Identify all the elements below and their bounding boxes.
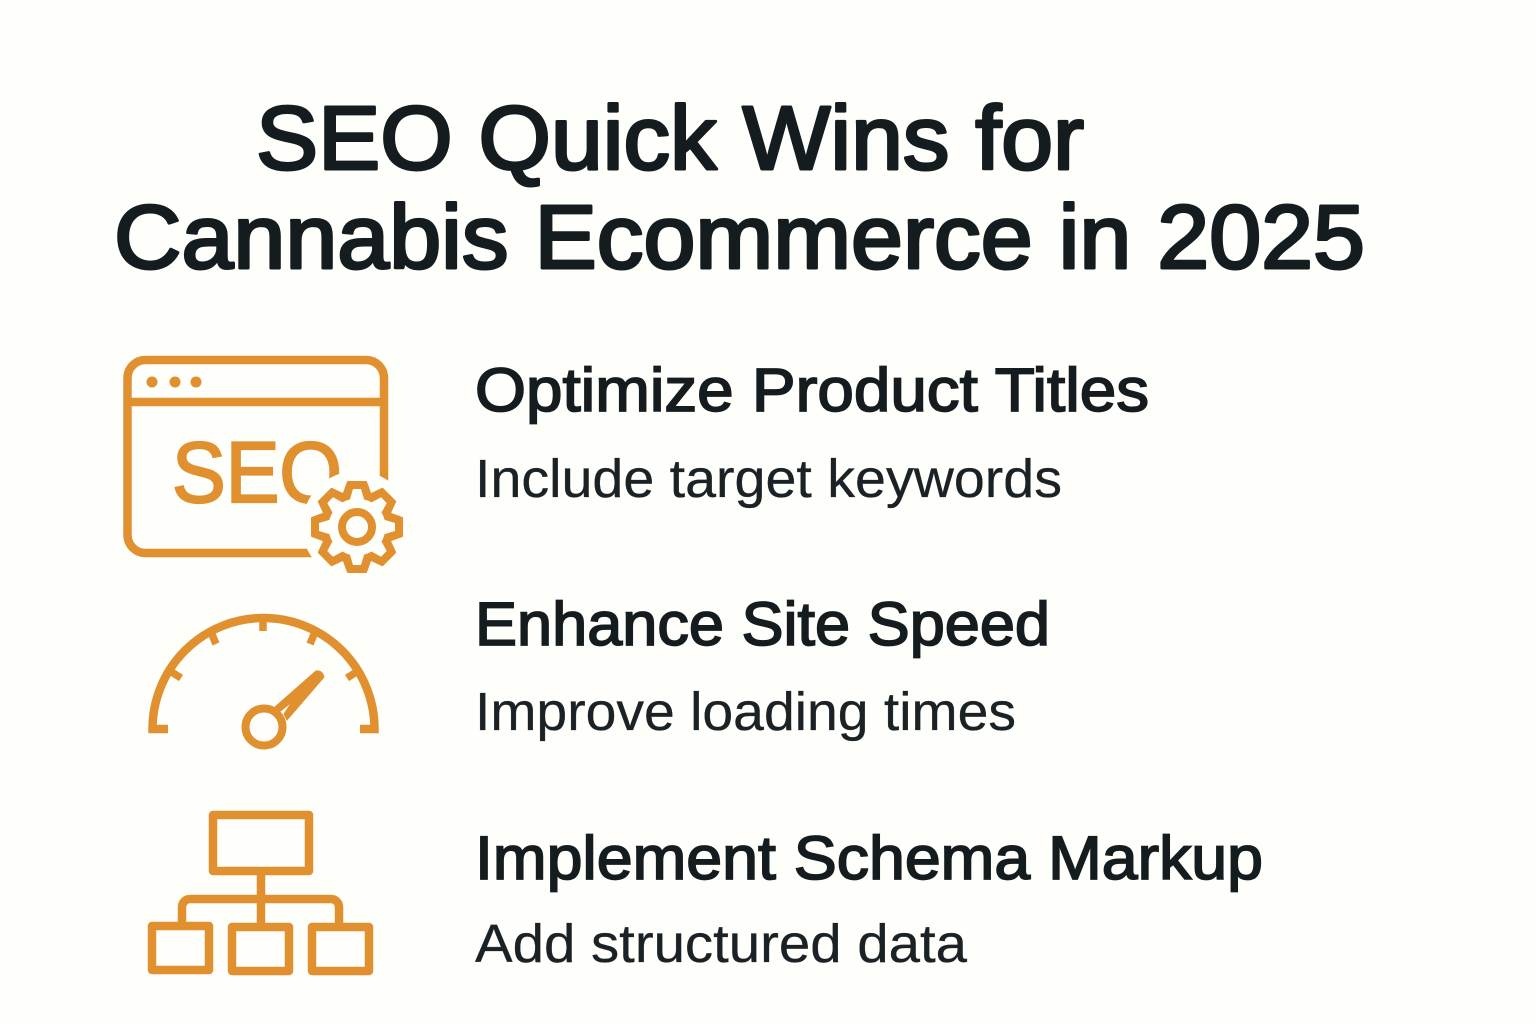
icon: site structure hierarchy bbox=[152, 815, 369, 971]
title: Cannabis Ecommerce in 2025 bbox=[114, 188, 1365, 288]
heading: optimize product titles: Optimize Product Titles bbox=[475, 356, 1149, 424]
text: include target keywords: Include target keywords bbox=[475, 449, 1062, 509]
text: improve loading times: Improve loading times bbox=[475, 682, 1016, 742]
title bbox=[114, 89, 1365, 288]
icon: speedometer gauge bbox=[152, 618, 374, 746]
heading: implement schema markup: Implement Schema Markup bbox=[475, 824, 1263, 892]
icon: SEO browser window with gear: SEO bbox=[172, 425, 342, 521]
heading: enhance site speed: Enhance Site Speed bbox=[475, 590, 1050, 658]
icon: SEO browser window with gear bbox=[127, 360, 412, 581]
title: SEO Quick Wins for bbox=[256, 89, 1084, 189]
text: add structured data: Add structured data bbox=[475, 914, 968, 974]
